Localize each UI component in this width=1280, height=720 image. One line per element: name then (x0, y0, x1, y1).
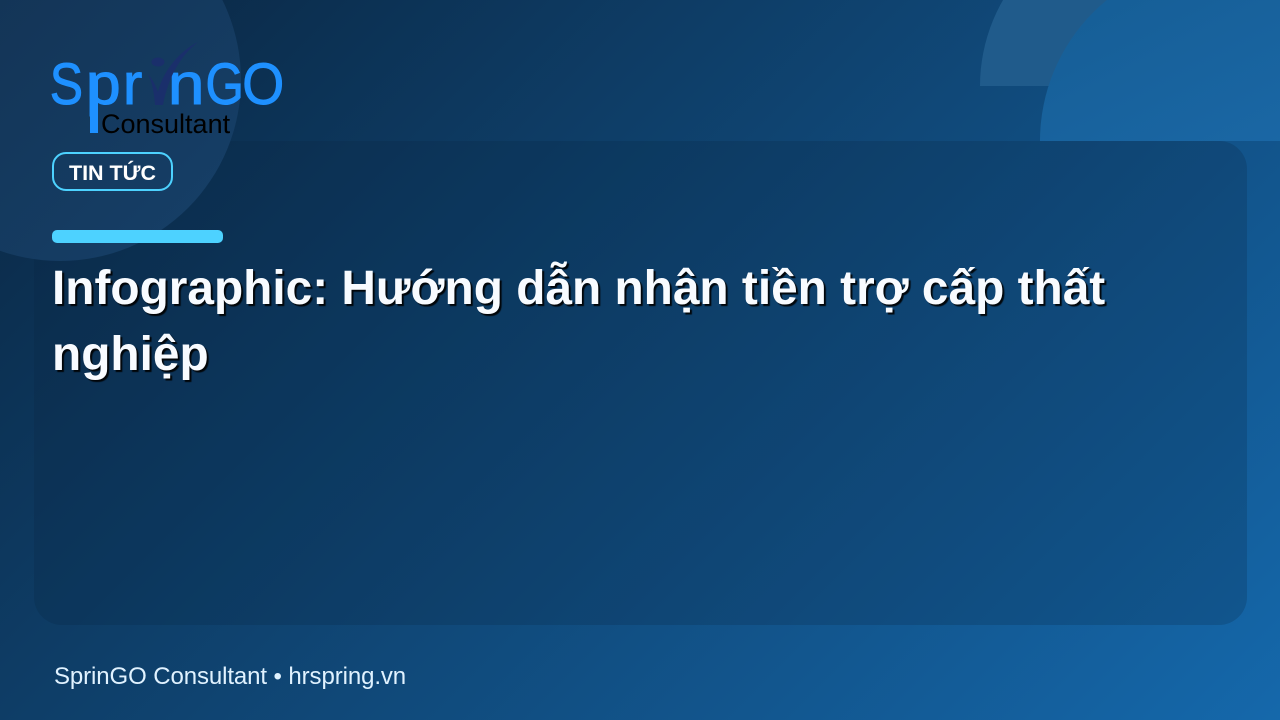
footer: SprinGO Consultant • hrspring.vn (54, 663, 406, 690)
logo wordmark: p (86, 51, 121, 116)
accent bar (52, 230, 223, 243)
category badge (52, 152, 173, 191)
logo figure icon (148, 42, 198, 105)
logo wordmark (50, 51, 284, 133)
title: Infographic: Hướng dẫn nhận tiền trợ cấp thất nghiệp (52, 262, 1105, 381)
panel: main content card (34, 141, 1247, 625)
category badge: TIN TỨC (69, 161, 156, 185)
logo wordmark: G (206, 52, 244, 117)
logo wordmark: n (168, 53, 204, 117)
logo wordmark: O (242, 51, 284, 116)
logo wordmark: S (50, 53, 83, 117)
logo: SprinGO Consultant (50, 43, 284, 139)
logo wordmark: r (123, 52, 142, 117)
logo subtitle: Consultant (101, 109, 231, 139)
